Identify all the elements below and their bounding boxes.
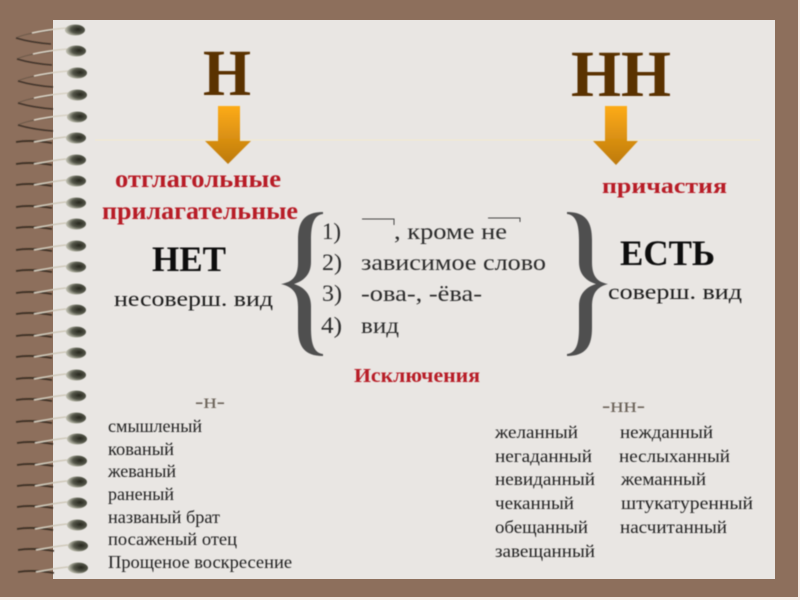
word list: -н- exceptions: жеваный [107,461,176,481]
heading: НН: НН [571,38,671,111]
word list: -нн- exceptions, column 2: насчитанный [620,517,727,537]
word list: -н- exceptions: кованый [108,439,174,459]
text: соверш. вид: соверш. вид [608,279,742,304]
word list: -нн- exceptions, column 2: неслыханный [619,446,730,466]
word list: -нн- exceptions, column 1 [494,422,595,561]
text: несоверш. вид: несоверш. вид [114,286,273,311]
word list: -нн- exceptions, column 1: завещанный [495,541,595,561]
label: отглагольные прилагательные: отглагольные [115,166,281,193]
word list: -н- exceptions [107,416,292,572]
heading: -нн-: -нн- [602,393,645,417]
numbered conditions list [321,219,546,339]
right brace [567,212,608,356]
label: причастия: причастия [602,173,727,198]
word list: -н- exceptions: раненый [108,484,174,504]
numbered conditions list: 4) [321,313,342,339]
word list: -нн- exceptions, column 1: невиданный [495,469,595,489]
word list: -нн- exceptions, column 1: чеканный [495,493,574,513]
text: НЕТ: НЕТ [152,239,226,279]
word list: -нн- exceptions, column 1: негаданный [495,446,592,466]
word list: -нн- exceptions, column 2 [619,422,753,537]
omitted-word markers [362,218,520,225]
label: Исключения: Исключения [354,365,480,387]
spiral binding [16,24,88,574]
heading: Н: Н [203,37,251,110]
word list: -нн- exceptions, column 2: нежданный [620,422,713,442]
label: отглагольные прилагательные [102,166,298,225]
word list: -н- exceptions: названый брат [108,507,220,527]
label: отглагольные прилагательные: прилагательные [102,198,298,225]
numbered conditions list: 1) [322,219,341,245]
arrow: НН down [593,106,638,165]
numbered conditions list: 3) [322,281,342,307]
left brace [281,212,323,356]
text: ЕСТЬ: ЕСТЬ [620,233,715,273]
word list: -н- exceptions: Прощеное воскресение [108,552,292,572]
numbered conditions list: , кроме не [394,219,507,245]
numbered conditions list: -ова-, -ёва- [361,281,482,307]
numbered conditions list: 2) [322,250,342,276]
word list: -н- exceptions: посаженый отец [108,529,237,549]
word list: -нн- exceptions, column 2: штукатуренный [621,493,753,513]
numbered conditions list: зависимое слово [361,250,546,276]
arrow: Н down [205,106,251,164]
numbered conditions list: вид [361,313,399,339]
word list: -нн- exceptions, column 2: жеманный [620,469,706,489]
heading: -н-: -н- [195,389,225,413]
word list: -н- exceptions: смышленый [108,416,202,436]
word list: -нн- exceptions, column 1: желанный [494,422,578,442]
word list: -нн- exceptions, column 1: обещанный [495,517,588,537]
